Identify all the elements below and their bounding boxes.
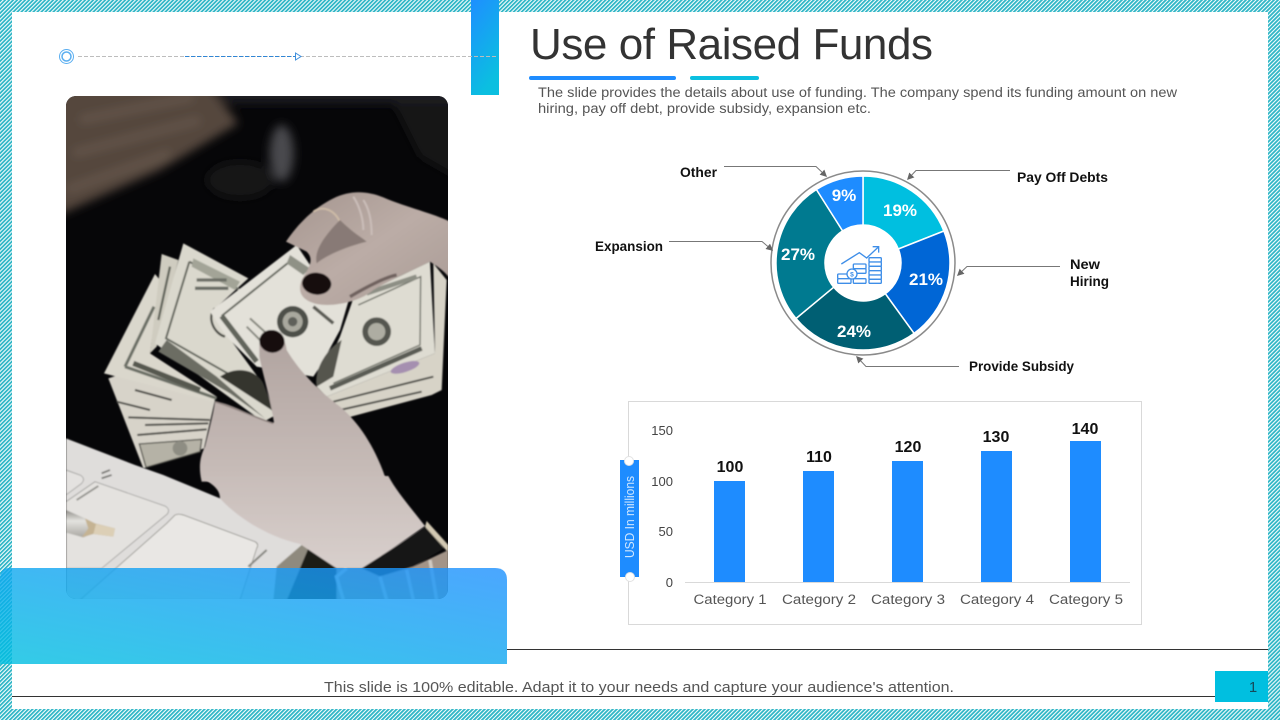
category labels: Category 5	[1049, 592, 1123, 607]
percentage labels	[781, 186, 943, 341]
icon: coins with rising arrow	[838, 247, 881, 283]
segment: provide subsidy 24%	[796, 287, 914, 350]
callout: pay off debts: Pay Off Debts	[1017, 170, 1108, 185]
y axis tick labels: 150	[651, 423, 673, 438]
bottom gradient band	[0, 568, 507, 664]
intro text	[538, 85, 1177, 116]
upper hand	[286, 192, 450, 305]
y axis tick labels: 100	[651, 474, 673, 489]
main twenty dollar bill	[155, 243, 274, 422]
segment: expansion 27%	[776, 190, 843, 318]
wrist	[202, 476, 425, 568]
bar value labels	[717, 421, 1098, 476]
y axis tick labels: 0	[666, 575, 673, 590]
nail: index finger	[301, 271, 332, 296]
title: Use of Raised Funds	[530, 20, 933, 69]
sleeve	[337, 550, 448, 600]
callout: new hiring	[958, 257, 1109, 289]
y axis title tag	[620, 456, 639, 582]
bar value labels: 130	[983, 429, 1009, 446]
category labels: Category 3	[871, 592, 945, 607]
intro text: hiring, pay off debt, provide subsidy, expansion etc.	[538, 101, 871, 116]
category labels: Category 4	[960, 592, 1035, 607]
photo: hands counting dollar bills	[66, 96, 448, 599]
callout: pay off debts	[908, 170, 1108, 185]
bar value labels: 140	[1072, 421, 1098, 438]
page number box	[1215, 671, 1268, 702]
segment: new hiring 21%	[885, 231, 950, 333]
percentage labels: 21%	[909, 270, 943, 289]
callout: expansion	[595, 239, 772, 254]
right bill	[317, 262, 435, 397]
lower hand thumb	[200, 333, 387, 482]
bar value labels: 100	[717, 459, 743, 476]
percentage labels: 19%	[883, 201, 917, 220]
y axis title tag: USD In millions	[623, 476, 637, 558]
bar value labels: 110	[806, 449, 832, 466]
callout: provide subsidy	[857, 357, 1074, 374]
y axis tick labels	[651, 423, 673, 590]
callout: new hiring: Hiring	[1070, 274, 1109, 289]
bar chart panel	[628, 402, 1142, 624]
bars	[714, 441, 1101, 582]
page number box: 1	[1249, 679, 1257, 696]
segment: other 9%	[816, 176, 863, 231]
bar value labels: 120	[895, 439, 921, 456]
percentage labels: 24%	[837, 322, 871, 341]
percentage labels: 9%	[832, 186, 856, 205]
centre bill	[210, 245, 348, 377]
y axis tick labels: 50	[659, 524, 673, 539]
footer text: This slide is 100% editable. Adapt it to your needs and capture your audience's attention.	[324, 679, 954, 696]
right stack of bills	[327, 263, 447, 417]
category labels	[694, 592, 1123, 607]
title underline accents	[529, 76, 759, 80]
dashed timeline with markers	[60, 50, 497, 64]
category labels: Category 1	[694, 592, 766, 607]
notebook	[66, 438, 303, 600]
top gradient tab	[471, 0, 499, 95]
callout: expansion: Expansion	[595, 239, 663, 254]
intro text: The slide provides the details about use of funding. The company spend its funding amount on new	[538, 85, 1177, 100]
nail: thumb	[258, 329, 286, 354]
second bill	[150, 254, 178, 353]
far left bill	[104, 274, 217, 402]
percentage labels: 27%	[781, 245, 815, 264]
lower fan of bills	[108, 367, 215, 468]
callout: other: Other	[680, 165, 718, 180]
pen	[66, 510, 88, 538]
segment: pay off debts 19%	[863, 176, 944, 249]
icon: coins with rising arrow: $	[850, 271, 854, 278]
callout: other	[680, 165, 826, 180]
category labels: Category 2	[782, 592, 856, 607]
watch strap	[362, 527, 443, 577]
footer rules	[12, 650, 1268, 696]
donut chart: use of funds	[771, 171, 955, 355]
callout: new hiring: New	[1070, 257, 1101, 272]
callout: provide subsidy: Provide Subsidy	[969, 359, 1074, 374]
